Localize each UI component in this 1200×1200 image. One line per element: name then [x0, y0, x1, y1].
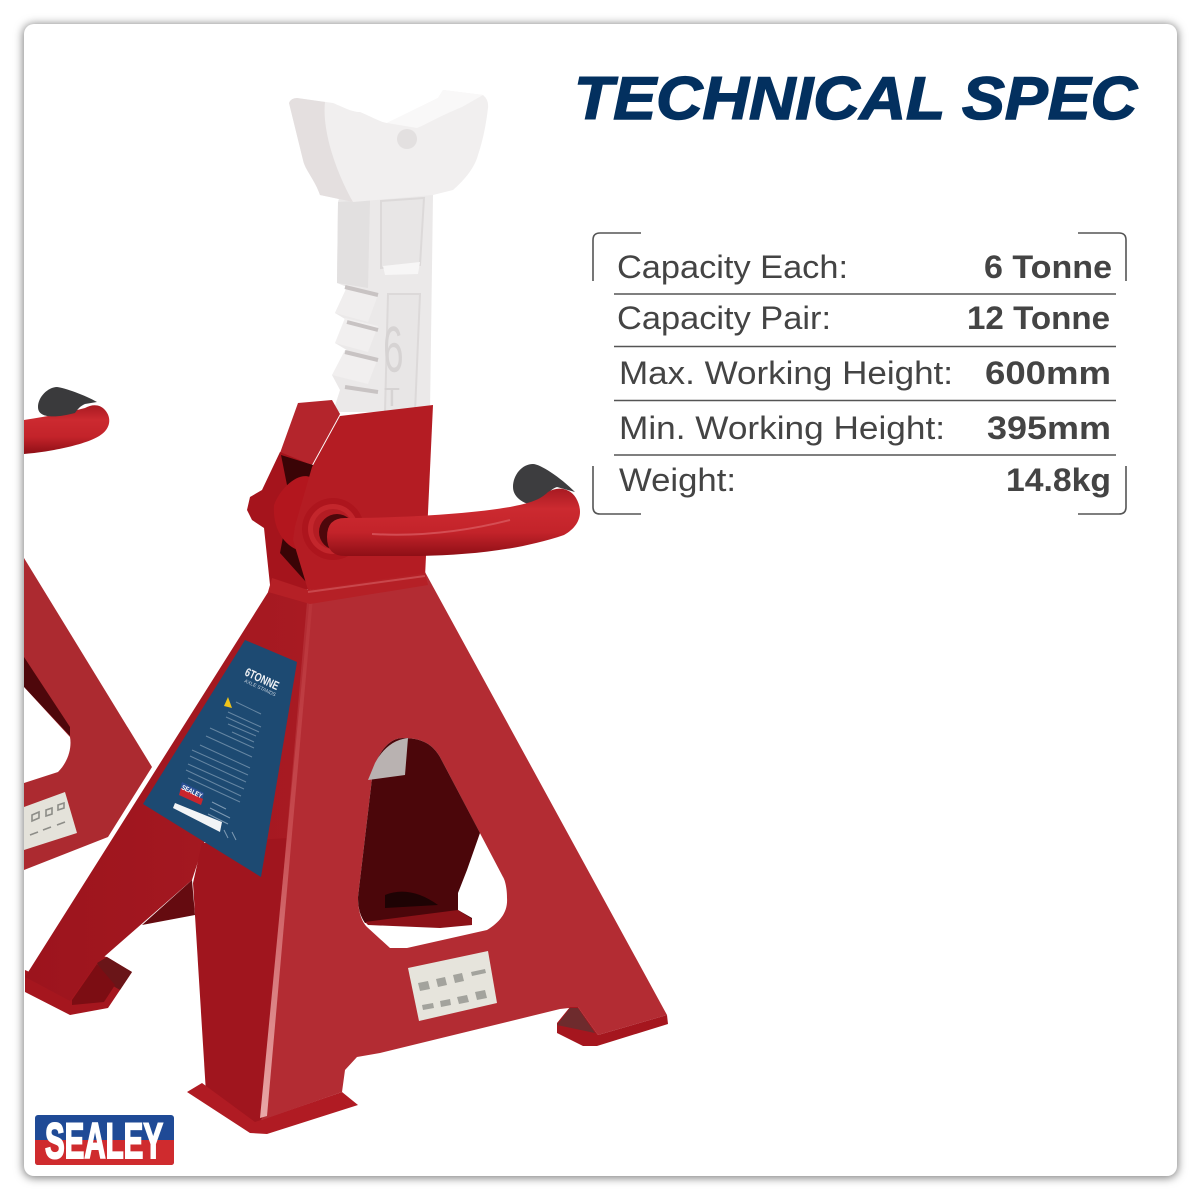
- front left panel of stand: [193, 838, 290, 1128]
- collar side plate and pivot: [247, 452, 313, 590]
- label subheading: AXLE STANDS: [243, 678, 277, 698]
- row: weight: [619, 462, 1111, 498]
- white ratchet post: [332, 195, 433, 412]
- mini brand mark: [179, 782, 204, 805]
- row: capacity each: Capacity Each:: [617, 249, 848, 285]
- number 6 cast in post: 6: [382, 313, 405, 387]
- collar front plate: [293, 405, 433, 590]
- brand logo: [35, 1113, 174, 1169]
- label heading: 6TONNE: [243, 665, 281, 693]
- row: capacity each: 6 Tonne: [984, 249, 1112, 285]
- brand logo: SEALEY: [45, 1113, 163, 1169]
- row: max working height: [619, 355, 1111, 391]
- red tube: [327, 489, 580, 556]
- row: weight: 14.8kg: [1006, 462, 1111, 498]
- row: max working height: Max. Working Height:: [619, 355, 953, 391]
- right face of stand: [262, 572, 667, 1120]
- row: min working height: [619, 410, 1111, 446]
- second jack stand behind, partly cropped: [24, 387, 152, 870]
- letter T cast in post: T: [384, 382, 400, 412]
- collar weld band: [268, 573, 428, 604]
- grab handle: [327, 464, 580, 556]
- compatibility sticker: [408, 951, 497, 1021]
- row: max working height: 600mm: [985, 355, 1111, 391]
- row: capacity pair: [617, 300, 1110, 336]
- row: weight: Weight:: [619, 462, 736, 498]
- row: capacity each: [617, 249, 1112, 285]
- row: min working height: Min. Working Height:: [619, 410, 945, 446]
- underside shadow of left leg: [142, 880, 195, 925]
- label footer text: [208, 802, 236, 840]
- warning triangle: [224, 697, 232, 708]
- warning label on stand: [143, 640, 297, 877]
- rear left leg: [25, 578, 310, 1001]
- right foot plate: [557, 1007, 668, 1046]
- rubber grip: [513, 464, 575, 505]
- jack stand photo group: [24, 90, 668, 1134]
- row: capacity pair: Capacity Pair:: [617, 300, 831, 336]
- table corner brackets: [593, 233, 1126, 514]
- title: TECHNICAL SPEC: [574, 65, 1139, 132]
- spec table: [593, 233, 1126, 514]
- front foot plate: [187, 1083, 358, 1134]
- window opening in stand: [358, 738, 507, 948]
- fold highlight: [260, 596, 313, 1118]
- row: min working height: 395mm: [987, 410, 1111, 446]
- row separators: [614, 294, 1116, 455]
- rear foot of main stand: [25, 955, 132, 1015]
- white saddle head: [289, 90, 488, 202]
- mini brand mark: SEALEY: [180, 784, 203, 800]
- row: capacity pair: 12 Tonne: [967, 300, 1110, 336]
- label instructions text lines: [186, 702, 261, 802]
- white bar on label: [173, 803, 222, 832]
- collar back plate: [280, 400, 340, 465]
- handle washer: [308, 504, 355, 554]
